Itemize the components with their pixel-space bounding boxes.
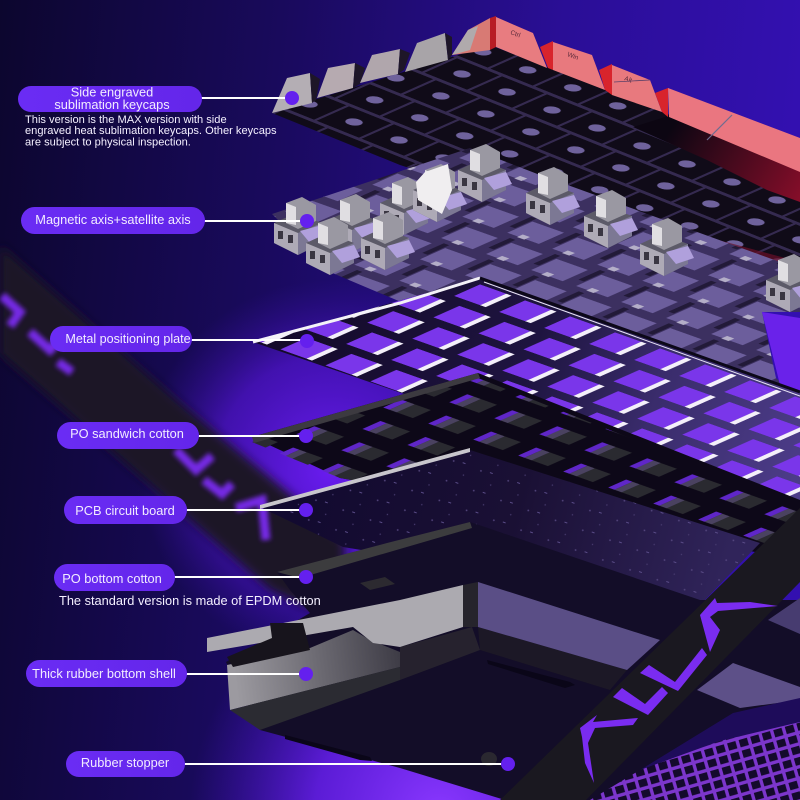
callout: PO bottom cotton (54, 564, 321, 608)
keycap legend: Win: Win (566, 51, 580, 62)
keycap undersides grid (272, 45, 800, 295)
logo letter L (640, 648, 707, 691)
shell top right face (478, 582, 660, 670)
metal positioning plate (253, 278, 800, 530)
logo letter A (700, 598, 778, 652)
leader line (200, 97, 288, 99)
logo letter U (613, 687, 668, 715)
PCB circuit board (260, 448, 760, 605)
switch layer (272, 144, 800, 420)
shell top right panel beyond strap (697, 663, 800, 708)
blurred rear strap with AULA logo (0, 245, 345, 625)
thick rubber bottom shell (207, 582, 800, 761)
description: This version is the MAX version with side (25, 114, 227, 126)
red underside below space bar (633, 116, 800, 202)
callout: magnetic axis (21, 207, 314, 234)
description: engraved heat sublimation keycaps. Other keycaps (25, 125, 277, 137)
dot (285, 91, 299, 105)
callout: metal positioning plate: Metal positioning plate (65, 332, 191, 346)
callout: thick rubber bottom shell: Thick rubber bottom shell (32, 666, 176, 681)
grey keycap row (272, 18, 490, 113)
PO bottom cotton and dark cavity (226, 522, 800, 800)
foot slot (487, 660, 575, 688)
red keycaps with legends (490, 16, 800, 172)
callout: PCB circuit board: PCB circuit board (75, 503, 175, 518)
logo letter A (580, 715, 638, 783)
callout: magnetic axis: Magnetic axis+satellite axis (35, 212, 191, 227)
front strap with AULA logo (500, 508, 800, 800)
note: The standard version is made of EPDM cotton (59, 593, 321, 608)
description: are subject to physical inspection. (25, 136, 191, 148)
callout: PCB circuit board (64, 496, 313, 524)
shell top lip (207, 585, 463, 652)
callout: rubber stopper (66, 751, 515, 777)
pill text: Side engraved (71, 84, 153, 100)
keycap legend: Alt: Alt (623, 75, 633, 85)
mesh pad (590, 698, 800, 800)
PO sandwich cotton (252, 373, 800, 560)
callout: metal positioning plate (50, 326, 314, 352)
callout: side engraved sublimation keycaps (18, 84, 299, 148)
callout: PO bottom cotton: PO bottom cotton (62, 571, 162, 586)
pill (18, 86, 202, 112)
keycap layer (272, 16, 800, 295)
callout: rubber stopper: Rubber stopper (81, 755, 170, 770)
keycap legend: Ctrl: Ctrl (509, 29, 522, 40)
callout: PO sandwich cotton: PO sandwich cotton (70, 426, 184, 441)
callout: PO sandwich cotton (57, 422, 313, 449)
shell side (227, 630, 400, 710)
bright purple gap (762, 312, 800, 395)
front switches (274, 144, 800, 312)
callout: thick rubber bottom shell (26, 660, 313, 687)
rubber stopper foot (481, 752, 497, 766)
pill text: sublimation keycaps (54, 97, 170, 112)
